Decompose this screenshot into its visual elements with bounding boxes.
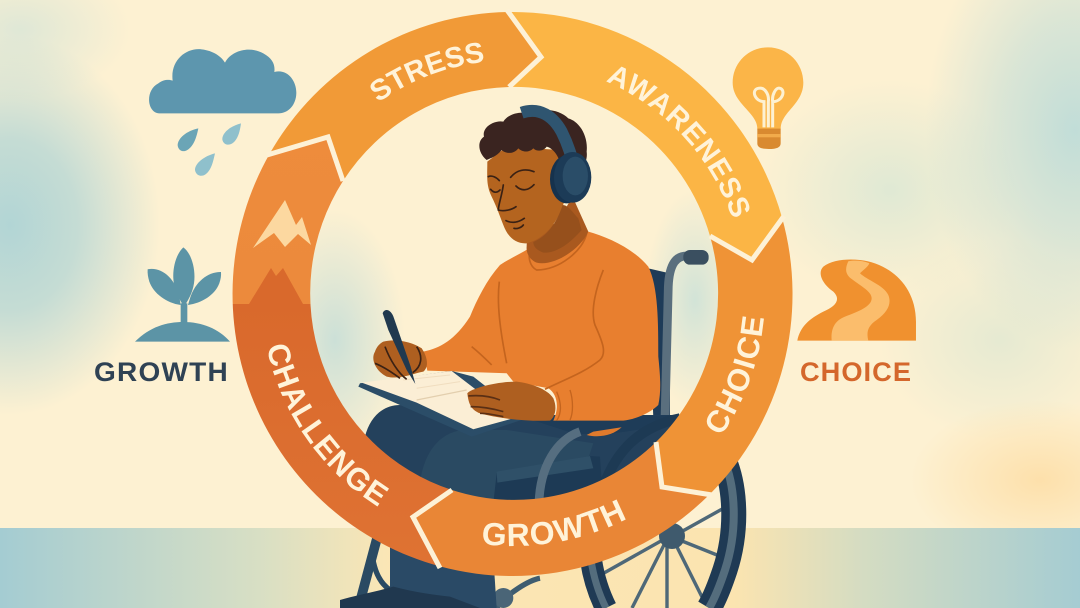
hair [479, 110, 587, 177]
segment: growth [416, 444, 708, 576]
face features [488, 170, 534, 229]
icon: dark mountain [249, 268, 303, 304]
segment: choice: CHOICE [706, 316, 764, 432]
wheelchair: back rest [648, 268, 670, 418]
icon: snow-capped peak [253, 200, 311, 248]
torso and arms: orange sweater [423, 232, 660, 421]
cycle ring [232, 12, 792, 576]
seat cushion [497, 456, 593, 483]
icon: light bulb [733, 47, 803, 149]
segment: awareness [512, 12, 782, 257]
lower legs [390, 533, 497, 608]
segment: challenge: CHALLENGE [268, 344, 389, 506]
headphones [522, 111, 591, 203]
writing hand [373, 310, 427, 384]
sweater peek below hem [587, 427, 622, 436]
wheelchair: large wheel [591, 465, 734, 608]
head and neck [479, 110, 588, 263]
notebook [358, 371, 527, 437]
armrest band under sweater [527, 415, 677, 435]
segment: growth: GROWTH [483, 500, 626, 546]
label: choice: CHOICE [800, 357, 912, 387]
segment: stress: STRESS [370, 42, 484, 100]
segment: awareness: AWARENESS [606, 66, 750, 217]
icon: rain drops [178, 123, 241, 176]
icon: winding road [797, 260, 916, 341]
figure: person in wheelchair writing [340, 110, 709, 608]
label: growth: GROWTH [94, 357, 229, 387]
icon: growth sprout [135, 247, 230, 342]
resting hand [467, 382, 555, 421]
horizon band [0, 528, 1080, 608]
chevron dividers [267, 10, 784, 568]
segment: stress [271, 12, 538, 178]
segment: challenge [232, 140, 452, 566]
trousers [365, 405, 673, 503]
wheelchair: push handle [665, 250, 709, 418]
segment: choice [656, 222, 792, 492]
pen [383, 310, 415, 384]
wheelchair: small front wheel and frame [353, 533, 540, 608]
shoes [340, 587, 480, 608]
icon: rain cloud [149, 49, 296, 176]
wheel arcs near seat [539, 418, 680, 503]
